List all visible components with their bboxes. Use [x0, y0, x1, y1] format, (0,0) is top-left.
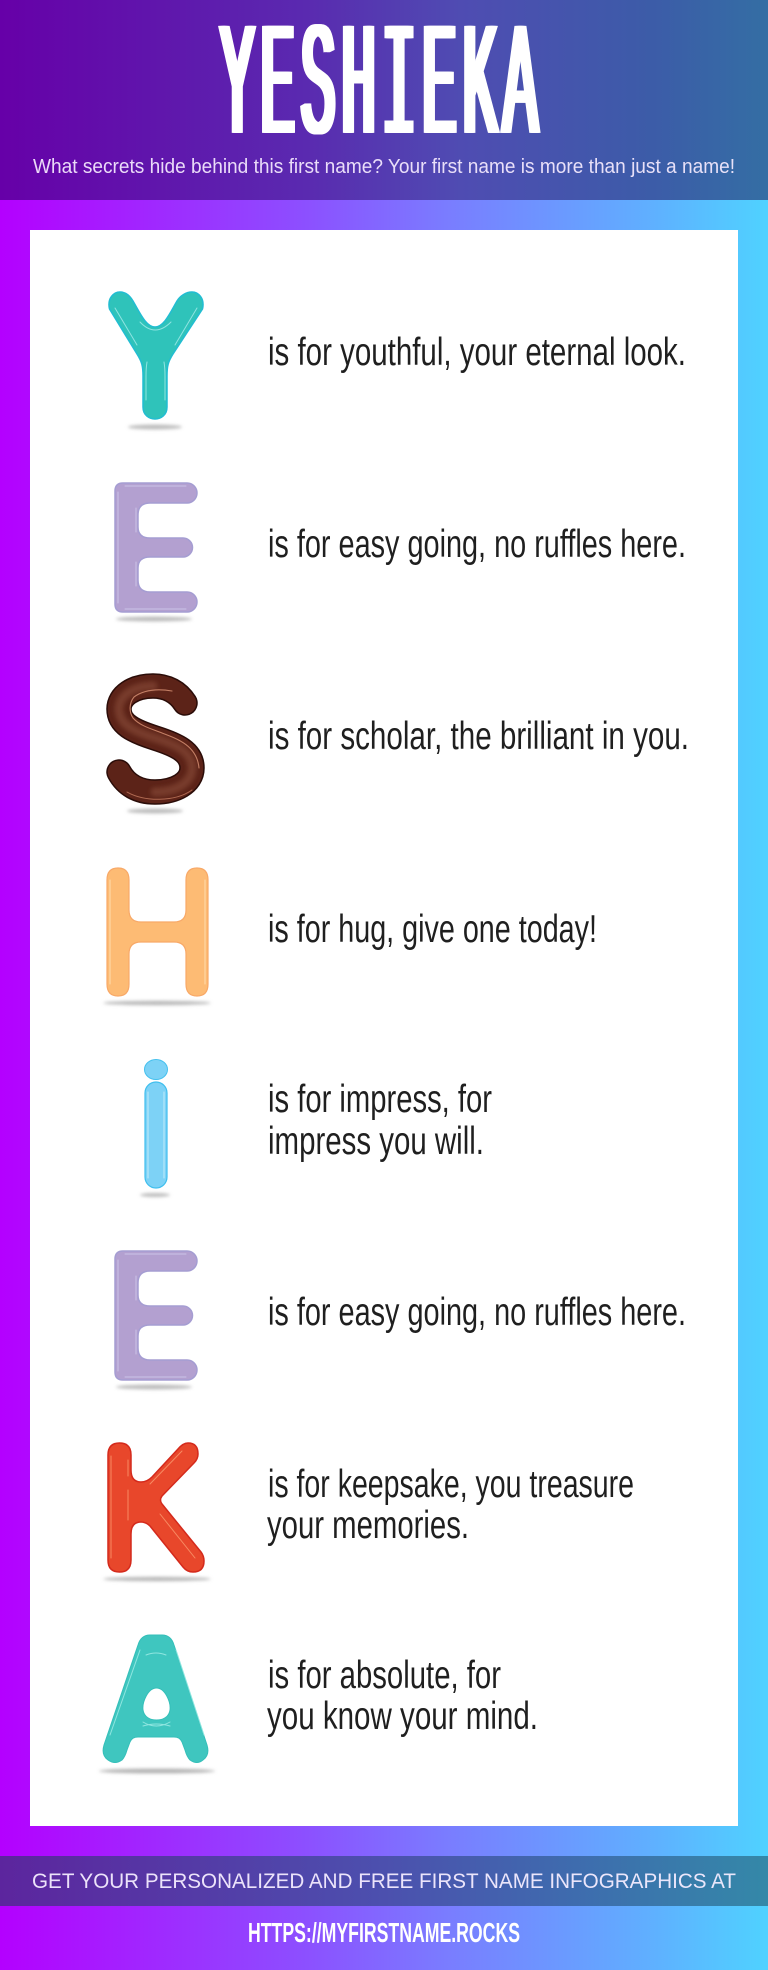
title: YESHIEKA — [217, 0, 540, 183]
text: K — [267, 1463, 634, 1547]
icon: letter E second — [115, 1251, 197, 1390]
text: A: you know your mind. — [267, 1695, 538, 1738]
text: K: is for keepsake, you treasure — [268, 1463, 634, 1506]
footer call to action: GET YOUR PERSONALIZED AND FREE FIRST NAME INFOGRAPHICS AT — [32, 1870, 736, 1893]
icon: letter H — [103, 868, 211, 1005]
footer url: HTTPS://MYFIRSTNAME.ROCKS — [248, 1917, 520, 1948]
text: I — [268, 1078, 492, 1163]
text: I: is for impress, for — [268, 1078, 492, 1121]
text: A: is for absolute, for — [268, 1654, 501, 1697]
white content panel — [30, 230, 738, 1826]
text: A — [267, 1654, 538, 1738]
icon: letter Y — [109, 292, 203, 430]
icon: letter E — [115, 483, 197, 622]
text: K: your memories. — [267, 1504, 469, 1547]
text: I: impress you will. — [268, 1120, 484, 1163]
subtitle: What secrets hide behind this first name? Your first name is more than just a name! — [33, 156, 735, 178]
footer band — [0, 1856, 768, 1906]
icon: letter K — [103, 1443, 211, 1581]
icon: letter A — [99, 1635, 215, 1773]
text: H: is for hug, give one today! — [268, 908, 597, 951]
icon: letter i — [140, 1060, 170, 1197]
icon: letter S — [119, 686, 199, 814]
header band — [0, 0, 768, 200]
